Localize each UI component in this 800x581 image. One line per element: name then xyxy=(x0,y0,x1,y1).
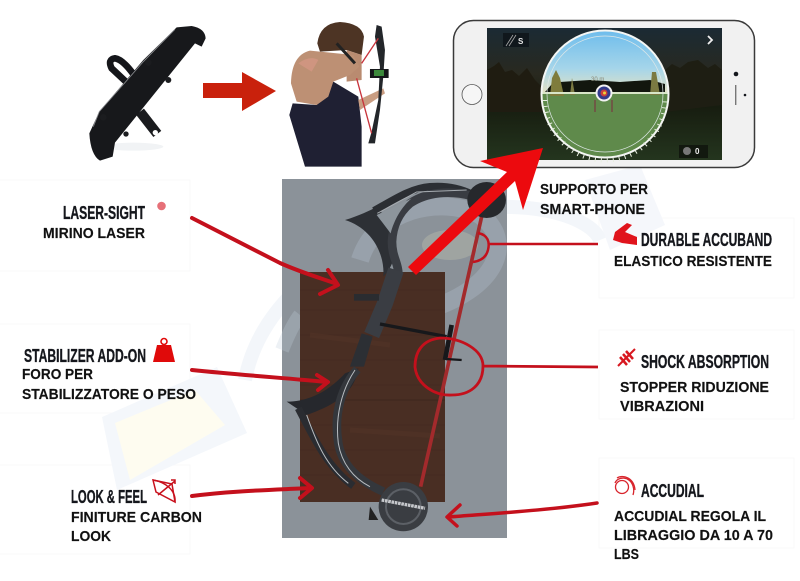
annotation: laser sight arrow xyxy=(192,218,338,294)
sight scope xyxy=(540,30,670,158)
annotation: stabilizer arrow xyxy=(192,370,328,390)
screen label: score xyxy=(679,145,708,158)
bow xyxy=(287,182,506,531)
text: durable accuband: ELASTICO RESISTENTE xyxy=(614,253,772,270)
icon: laser dot xyxy=(157,202,166,210)
big red arrow to phone xyxy=(408,148,543,275)
text: accudial: ACCUDIAL xyxy=(641,481,704,501)
text: look and feel xyxy=(71,487,202,545)
photo: archer using the bow xyxy=(289,22,389,167)
text: look and feel: LOOK & FEEL xyxy=(71,487,147,507)
phone sensors xyxy=(734,72,746,105)
text: shock absorption xyxy=(620,352,769,415)
annotation: look and feel arrow xyxy=(192,478,312,498)
annotation: accuband bracket xyxy=(473,233,598,262)
watermark xyxy=(102,165,665,490)
text: shock absorption: VIBRAZIONI xyxy=(620,398,704,415)
photo: phone mount xyxy=(89,26,206,161)
text: stabilizer add-on: FORO PER xyxy=(22,366,93,383)
photo: gray panel with bow on wood xyxy=(282,179,507,538)
bow string xyxy=(421,217,482,487)
screen label: arrows remaining: S xyxy=(518,37,524,46)
screen label: score: 0 xyxy=(695,147,700,156)
icon: dial xyxy=(615,476,635,495)
arrow: red brush arrow to archer xyxy=(203,72,276,111)
accudial cam xyxy=(379,482,428,531)
text: accudial xyxy=(614,481,773,563)
target xyxy=(596,84,612,102)
icon: muscle xyxy=(613,223,637,245)
phone screen xyxy=(487,28,722,160)
text: laser sight: MIRINO LASER xyxy=(43,225,145,242)
screen label: arrows remaining xyxy=(503,33,529,47)
text: stabilizer add-on: STABILIZZATORE O PESO xyxy=(22,386,196,403)
screen label: distance: 30 m xyxy=(591,77,604,83)
text: stabilizer add-on: STABILIZER ADD-ON xyxy=(24,346,146,366)
panel: info card outlines xyxy=(0,180,794,554)
icon: weight xyxy=(153,338,175,362)
text: accudial: LIBRAGGIO DA 10 A 70 xyxy=(614,527,773,544)
text: supporto per smart-phone: SMART-PHONE xyxy=(540,201,645,218)
text: stabilizer add-on xyxy=(22,346,196,403)
soft watermark arcs on panel xyxy=(282,206,498,350)
text: shock absorption: STOPPER RIDUZIONE xyxy=(620,379,769,396)
annotation: shock absorption circle xyxy=(415,338,598,395)
icon: shock absorber xyxy=(618,349,635,366)
phone home button xyxy=(462,84,482,104)
stabilizer arm xyxy=(380,324,447,337)
wood board xyxy=(300,272,445,502)
upper cam xyxy=(467,182,506,218)
icon: bow and arrow xyxy=(153,480,175,502)
text: accudial: LBS xyxy=(614,546,639,563)
text: look and feel: FINITURE CARBON xyxy=(71,509,202,526)
phone illustration xyxy=(454,20,754,168)
text: durable accuband xyxy=(614,230,772,270)
annotation: accudial arrow xyxy=(447,503,597,526)
text: laser sight xyxy=(43,203,145,242)
text: accudial: ACCUDIAL REGOLA IL xyxy=(614,508,766,525)
text: supporto per smart-phone: SUPPORTO PER xyxy=(540,181,648,198)
text: supporto per smart-phone xyxy=(540,181,648,218)
text: look and feel: LOOK xyxy=(71,528,111,545)
text: laser sight: LASER-SIGHT xyxy=(63,203,145,223)
screen icon: next xyxy=(708,36,712,44)
